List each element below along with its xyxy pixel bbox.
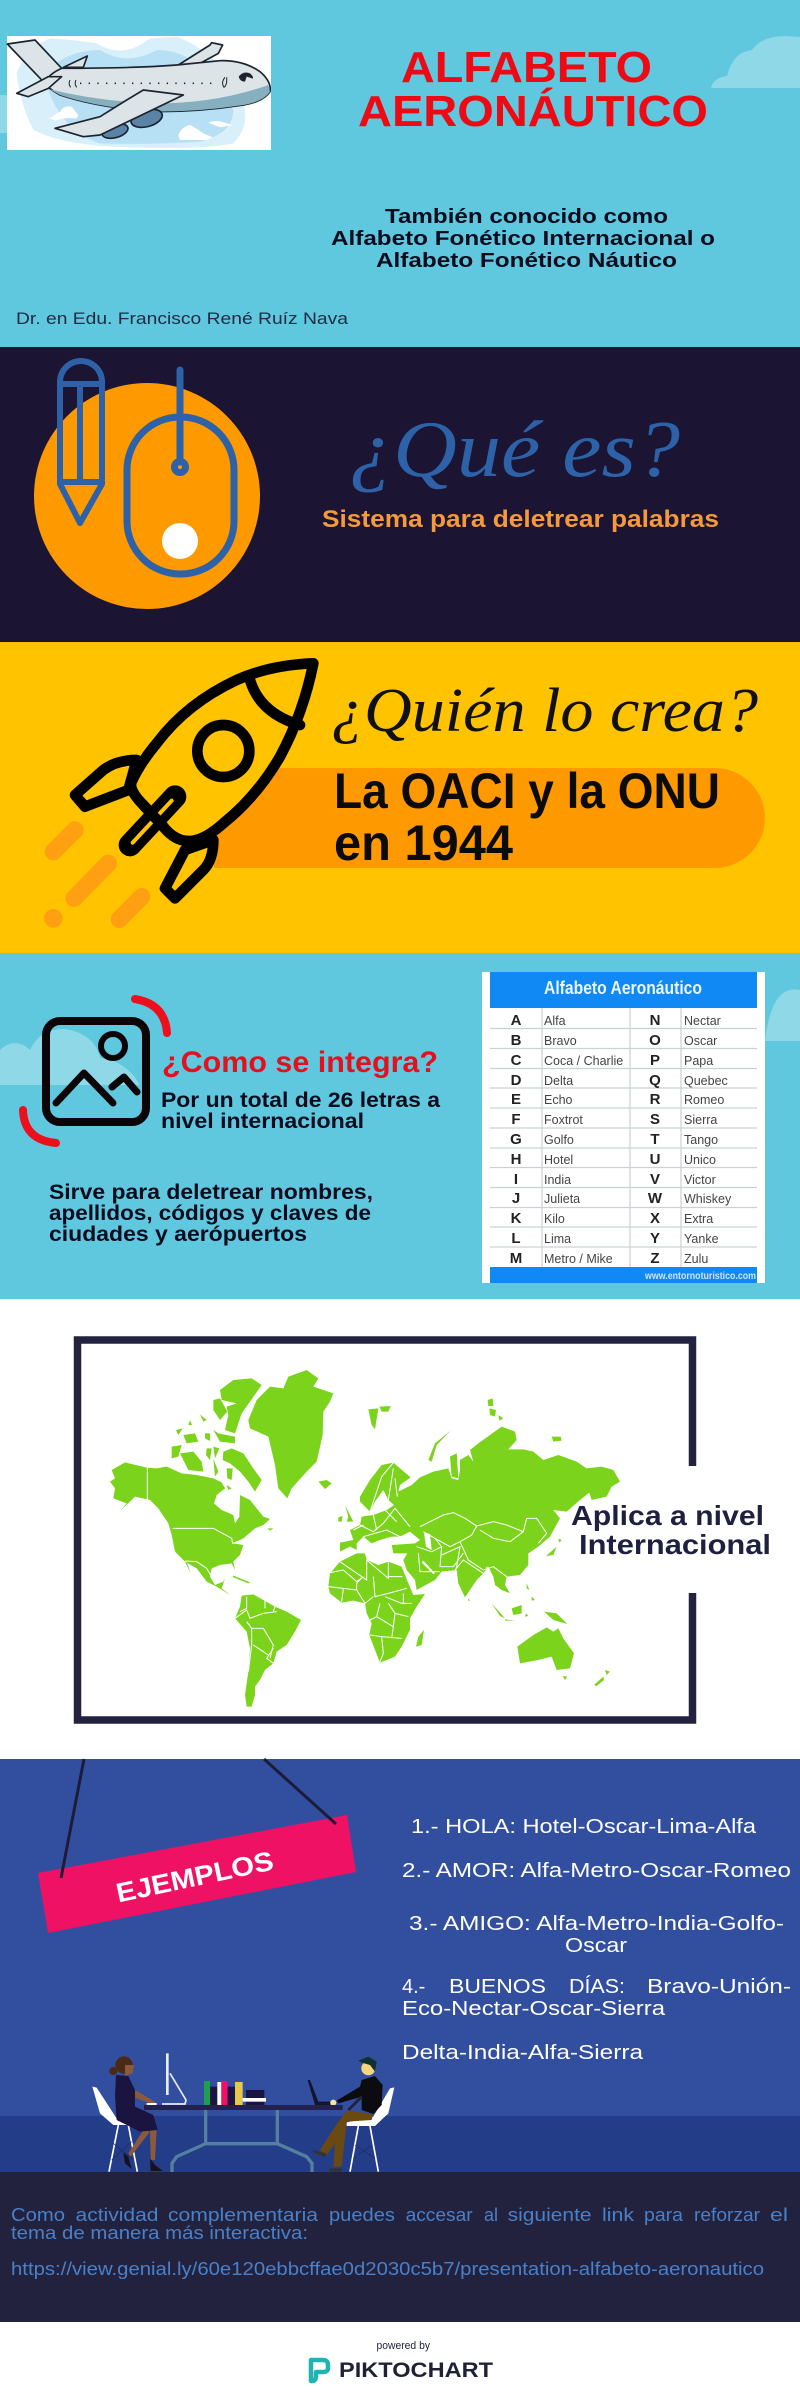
table: aeronautical alphabet: K [511, 1210, 522, 1227]
panel: header [0, 0, 800, 347]
text: activity intro [11, 2205, 788, 2243]
table: aeronautical alphabet: Zulu [684, 1252, 708, 1266]
table: aeronautical alphabet: A [511, 1012, 522, 1029]
icon: cloud right [765, 989, 800, 1041]
text: total letters [161, 1089, 440, 1133]
table: aeronautical alphabet: N [650, 1012, 660, 1029]
subtitle: También conocido como [385, 206, 668, 228]
table: aeronautical alphabet: U [650, 1151, 660, 1168]
table: aeronautical alphabet: W [648, 1190, 663, 1207]
table: aeronautical alphabet: Foxtrot [544, 1113, 583, 1127]
text: uses: apellidos, códigos y claves de [49, 1202, 371, 1225]
table: aeronautical alphabet: G [510, 1131, 522, 1148]
icon: piktochart logo [311, 2360, 328, 2381]
title: AERONÁUTICO [358, 86, 708, 136]
text: total letters: Por un total de 26 letras a [161, 1089, 440, 1112]
panel: ejemplos [0, 1759, 800, 2172]
text: example 4 [402, 1975, 791, 2064]
table: aeronautical alphabet: Alfabeto Aeronáutico [544, 978, 702, 998]
text: aplica a nivel internacional: Aplica a nivel [571, 1500, 764, 1531]
panel: footer [0, 2322, 800, 2402]
table: aeronautical alphabet: C [511, 1052, 522, 1069]
table: aeronautical alphabet: Lima [544, 1232, 571, 1246]
table: aeronautical alphabet: Golfo [544, 1133, 574, 1147]
sign: ejemplos: EJEMPLOS [113, 1846, 276, 1908]
table: aeronautical alphabet: Coca / Charlie [544, 1054, 623, 1068]
text: activity intro: actividad [76, 2205, 158, 2225]
table: aeronautical alphabet: O [649, 1032, 661, 1049]
table: aeronautical alphabet: M [510, 1250, 522, 1267]
subtitle: Alfabeto Fonético Internacional o [331, 228, 715, 250]
table: aeronautical alphabet: D [511, 1072, 522, 1089]
subtitle [331, 206, 715, 272]
table: aeronautical alphabet: P [650, 1052, 660, 1069]
icon: image frame [23, 999, 167, 1143]
illustration: two people at a desk [92, 2053, 394, 2172]
table: aeronautical alphabet: Hotel [544, 1153, 573, 1167]
icon: cloud left [0, 1029, 140, 1085]
table: aeronautical alphabet: Z [650, 1250, 660, 1267]
table: aeronautical alphabet: Y [650, 1230, 660, 1247]
table: aeronautical alphabet: Unico [684, 1153, 716, 1167]
table: aeronautical alphabet: Nectar [684, 1014, 721, 1028]
table: aeronautical alphabet: H [511, 1151, 521, 1168]
text: definition: Sistema para deletrear palabras [322, 506, 719, 533]
text: uses: Sirve para deletrear nombres, [49, 1181, 373, 1204]
text: example 4: Delta-India-Alfa-Sierra [402, 2042, 644, 2064]
table: aeronautical alphabet: Delta [544, 1074, 573, 1088]
text: creators [334, 763, 720, 871]
text: creators: en 1944 [334, 815, 513, 871]
icon: pencil [60, 361, 102, 523]
text: uses [49, 1181, 373, 1246]
table: aeronautical alphabet: E [511, 1091, 521, 1108]
table: aeronautical alphabet: Echo [544, 1093, 573, 1107]
text: example 4: Bravo-Unión- [647, 1976, 791, 1998]
table: aeronautical alphabet: Oscar [684, 1034, 717, 1048]
table: aeronautical alphabet: Kilo [544, 1212, 565, 1226]
text: example 2: 2.- AMOR: Alfa-Metro-Oscar-Romeo [402, 1860, 791, 1882]
text: activity intro: reforzar [694, 2205, 760, 2225]
table: aeronautical alphabet [482, 972, 765, 1283]
text: total letters: nivel internacional [161, 1110, 364, 1133]
table: aeronautical alphabet: V [650, 1171, 660, 1188]
text: piktochart: PIKTOCHART [339, 2359, 493, 2382]
icon: rocket [75, 663, 313, 898]
world map [110, 1370, 620, 1707]
icon: orange circle [34, 383, 260, 609]
panel: aplica a nivel internacional [0, 1299, 800, 1759]
text: activity intro: link [602, 2205, 635, 2225]
table: aeronautical alphabet: I [514, 1171, 518, 1188]
heading: ¿Como se integra? [162, 1046, 438, 1079]
table: aeronautical alphabet: J [512, 1190, 520, 1207]
panel: actividad complementaria [0, 2172, 800, 2322]
author: Dr. en Edu. Francisco René Ruíz Nava [16, 309, 349, 328]
text: activity intro: siguiente [508, 2205, 592, 2225]
panel: qué es [0, 347, 800, 642]
text: link: https://view.genial.ly/60e120ebbcffae0d2030c5b7/presentation-alfabeto-aeronautico [11, 2259, 764, 2279]
table: aeronautical alphabet: Extra [684, 1212, 713, 1226]
table: aeronautical alphabet: Alfa [544, 1014, 566, 1028]
table: aeronautical alphabet: S [650, 1111, 660, 1128]
panel: quién lo crea [0, 642, 800, 953]
orange pill [214, 768, 765, 868]
table: aeronautical alphabet: R [650, 1091, 661, 1108]
image: airplane illustration [7, 36, 271, 150]
table: aeronautical alphabet: F [511, 1111, 521, 1128]
table: aeronautical alphabet: X [650, 1210, 660, 1227]
heading: ¿Qué es? [349, 406, 680, 494]
table: aeronautical alphabet: Tango [684, 1133, 718, 1147]
text: creators: La OACI y la ONU [334, 763, 720, 819]
text: activity intro: complementaria [168, 2205, 319, 2225]
icon: cloud left edge [0, 95, 8, 133]
text: example 4: BUENOS [449, 1976, 546, 1998]
icon: mouse [127, 370, 234, 574]
icon: cloud top right [711, 36, 800, 88]
table: aeronautical alphabet: Q [649, 1072, 661, 1089]
text: example 3: Oscar [565, 1935, 627, 1957]
table: aeronautical alphabet: B [511, 1032, 522, 1049]
table: aeronautical alphabet: Metro / Mike [544, 1252, 613, 1266]
text: activity intro: puedes [329, 2205, 395, 2225]
table: aeronautical alphabet: Julieta [544, 1192, 580, 1206]
table: aeronautical alphabet: Papa [684, 1054, 713, 1068]
text: example 4: Eco-Nectar-Oscar-Sierra [402, 1998, 666, 2020]
table: aeronautical alphabet: Quebec [684, 1074, 728, 1088]
table: aeronautical alphabet: Yanke [684, 1232, 719, 1246]
panel: cómo se integra [0, 953, 800, 1299]
text: example 1: 1.- HOLA: Hotel-Oscar-Lima-Alfa [411, 1816, 757, 1838]
subtitle: Alfabeto Fonético Náutico [376, 250, 677, 272]
text: example 3 [409, 1913, 784, 1957]
table: aeronautical alphabet: L [511, 1230, 521, 1247]
table: aeronautical alphabet: T [650, 1131, 660, 1148]
table: aeronautical alphabet: Victor [684, 1173, 716, 1187]
text: activity intro: al [484, 2205, 498, 2225]
text: activity intro: el [770, 2205, 788, 2225]
table: aeronautical alphabet: Bravo [544, 1034, 577, 1048]
text: example 4: 4.- [402, 1976, 425, 1998]
icon: rocket flames [44, 830, 142, 928]
title [358, 43, 708, 136]
frame [78, 1340, 692, 1720]
table: aeronautical alphabet: Romeo [684, 1093, 724, 1107]
text: aplica a nivel internacional: Internacional [579, 1529, 771, 1560]
table: aeronautical alphabet: www.entornoturistico.com [644, 1271, 756, 1282]
text: example 4: DÍAS: [569, 1975, 625, 1998]
table: aeronautical alphabet: Sierra [684, 1113, 717, 1127]
table: aeronautical alphabet: India [544, 1173, 571, 1187]
text: activity intro: Como [11, 2205, 65, 2225]
heading: ¿Quién lo crea? [331, 677, 758, 745]
text: activity intro: tema de manera más interactiva: [11, 2223, 308, 2243]
text: uses: ciudades y aerópuertos [49, 1223, 307, 1246]
text: activity intro: accesar [406, 2205, 473, 2225]
table: aeronautical alphabet: Whiskey [684, 1192, 732, 1206]
sign: ejemplos [38, 1759, 356, 1933]
text: powered by: powered by [376, 2340, 430, 2352]
text: aplica a nivel internacional [571, 1500, 771, 1560]
text: example 3: 3.- AMIGO: Alfa-Metro-India-Golfo- [409, 1913, 784, 1935]
text: activity intro: para [644, 2205, 684, 2225]
title: ALFABETO [401, 43, 652, 92]
